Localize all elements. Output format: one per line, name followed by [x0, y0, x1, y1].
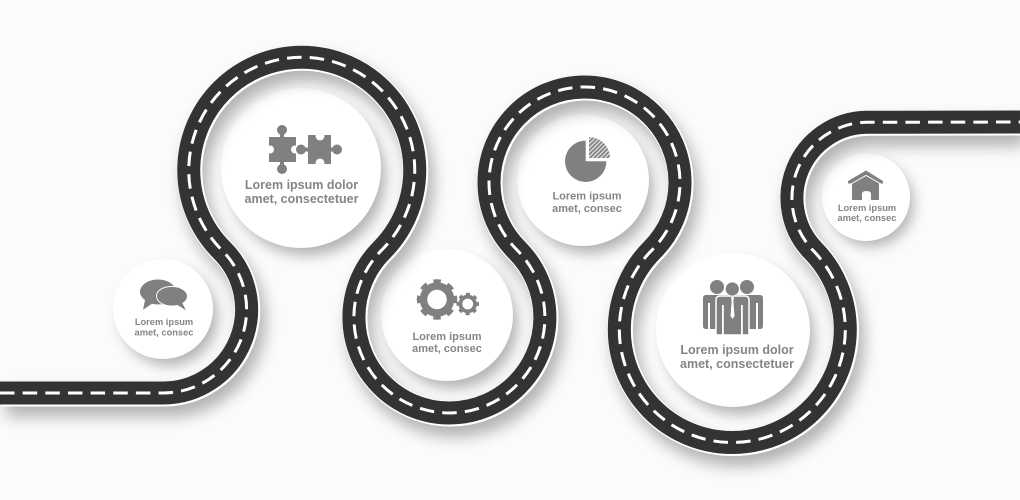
icon: pie chart	[565, 137, 610, 182]
text: house label: amet, consec	[838, 213, 896, 223]
text: gears label: amet, consec	[412, 343, 482, 355]
text: chat label: Lorem ipsum	[135, 317, 193, 327]
text: gears label	[412, 331, 482, 355]
panel: circle 4 pie	[517, 114, 653, 253]
text: pie label: amet, consec	[552, 203, 622, 215]
icon: gears	[416, 279, 479, 320]
panel: circle 1 chat	[113, 259, 217, 365]
text: chat label: amet, consec	[135, 328, 193, 338]
text: people label: Lorem ipsum dolor	[680, 343, 794, 357]
text: pie label	[552, 190, 622, 215]
icon: house	[848, 170, 883, 200]
panel: circle 2 puzzle	[221, 88, 385, 255]
text: puzzle label: amet, consectetuer	[245, 192, 359, 206]
text: house label	[838, 203, 896, 223]
icon: speech bubbles	[140, 280, 188, 312]
text: people label: amet, consectetuer	[680, 357, 794, 371]
panel: circle 5 people	[656, 253, 814, 414]
panel: circle 3 gears	[381, 249, 517, 388]
text: puzzle label: Lorem ipsum dolor	[245, 178, 358, 192]
text: people label	[680, 343, 794, 371]
text: house label: Lorem ipsum	[838, 203, 896, 213]
text: chat label	[135, 317, 193, 338]
text: gears label: Lorem ipsum	[412, 331, 482, 343]
icon: puzzle pieces	[266, 125, 342, 174]
icon: people	[703, 280, 763, 335]
text: puzzle label	[245, 178, 359, 206]
panel: circle 6 house	[822, 153, 913, 246]
road	[0, 57, 1020, 453]
text: pie label: Lorem ipsum	[552, 190, 622, 202]
